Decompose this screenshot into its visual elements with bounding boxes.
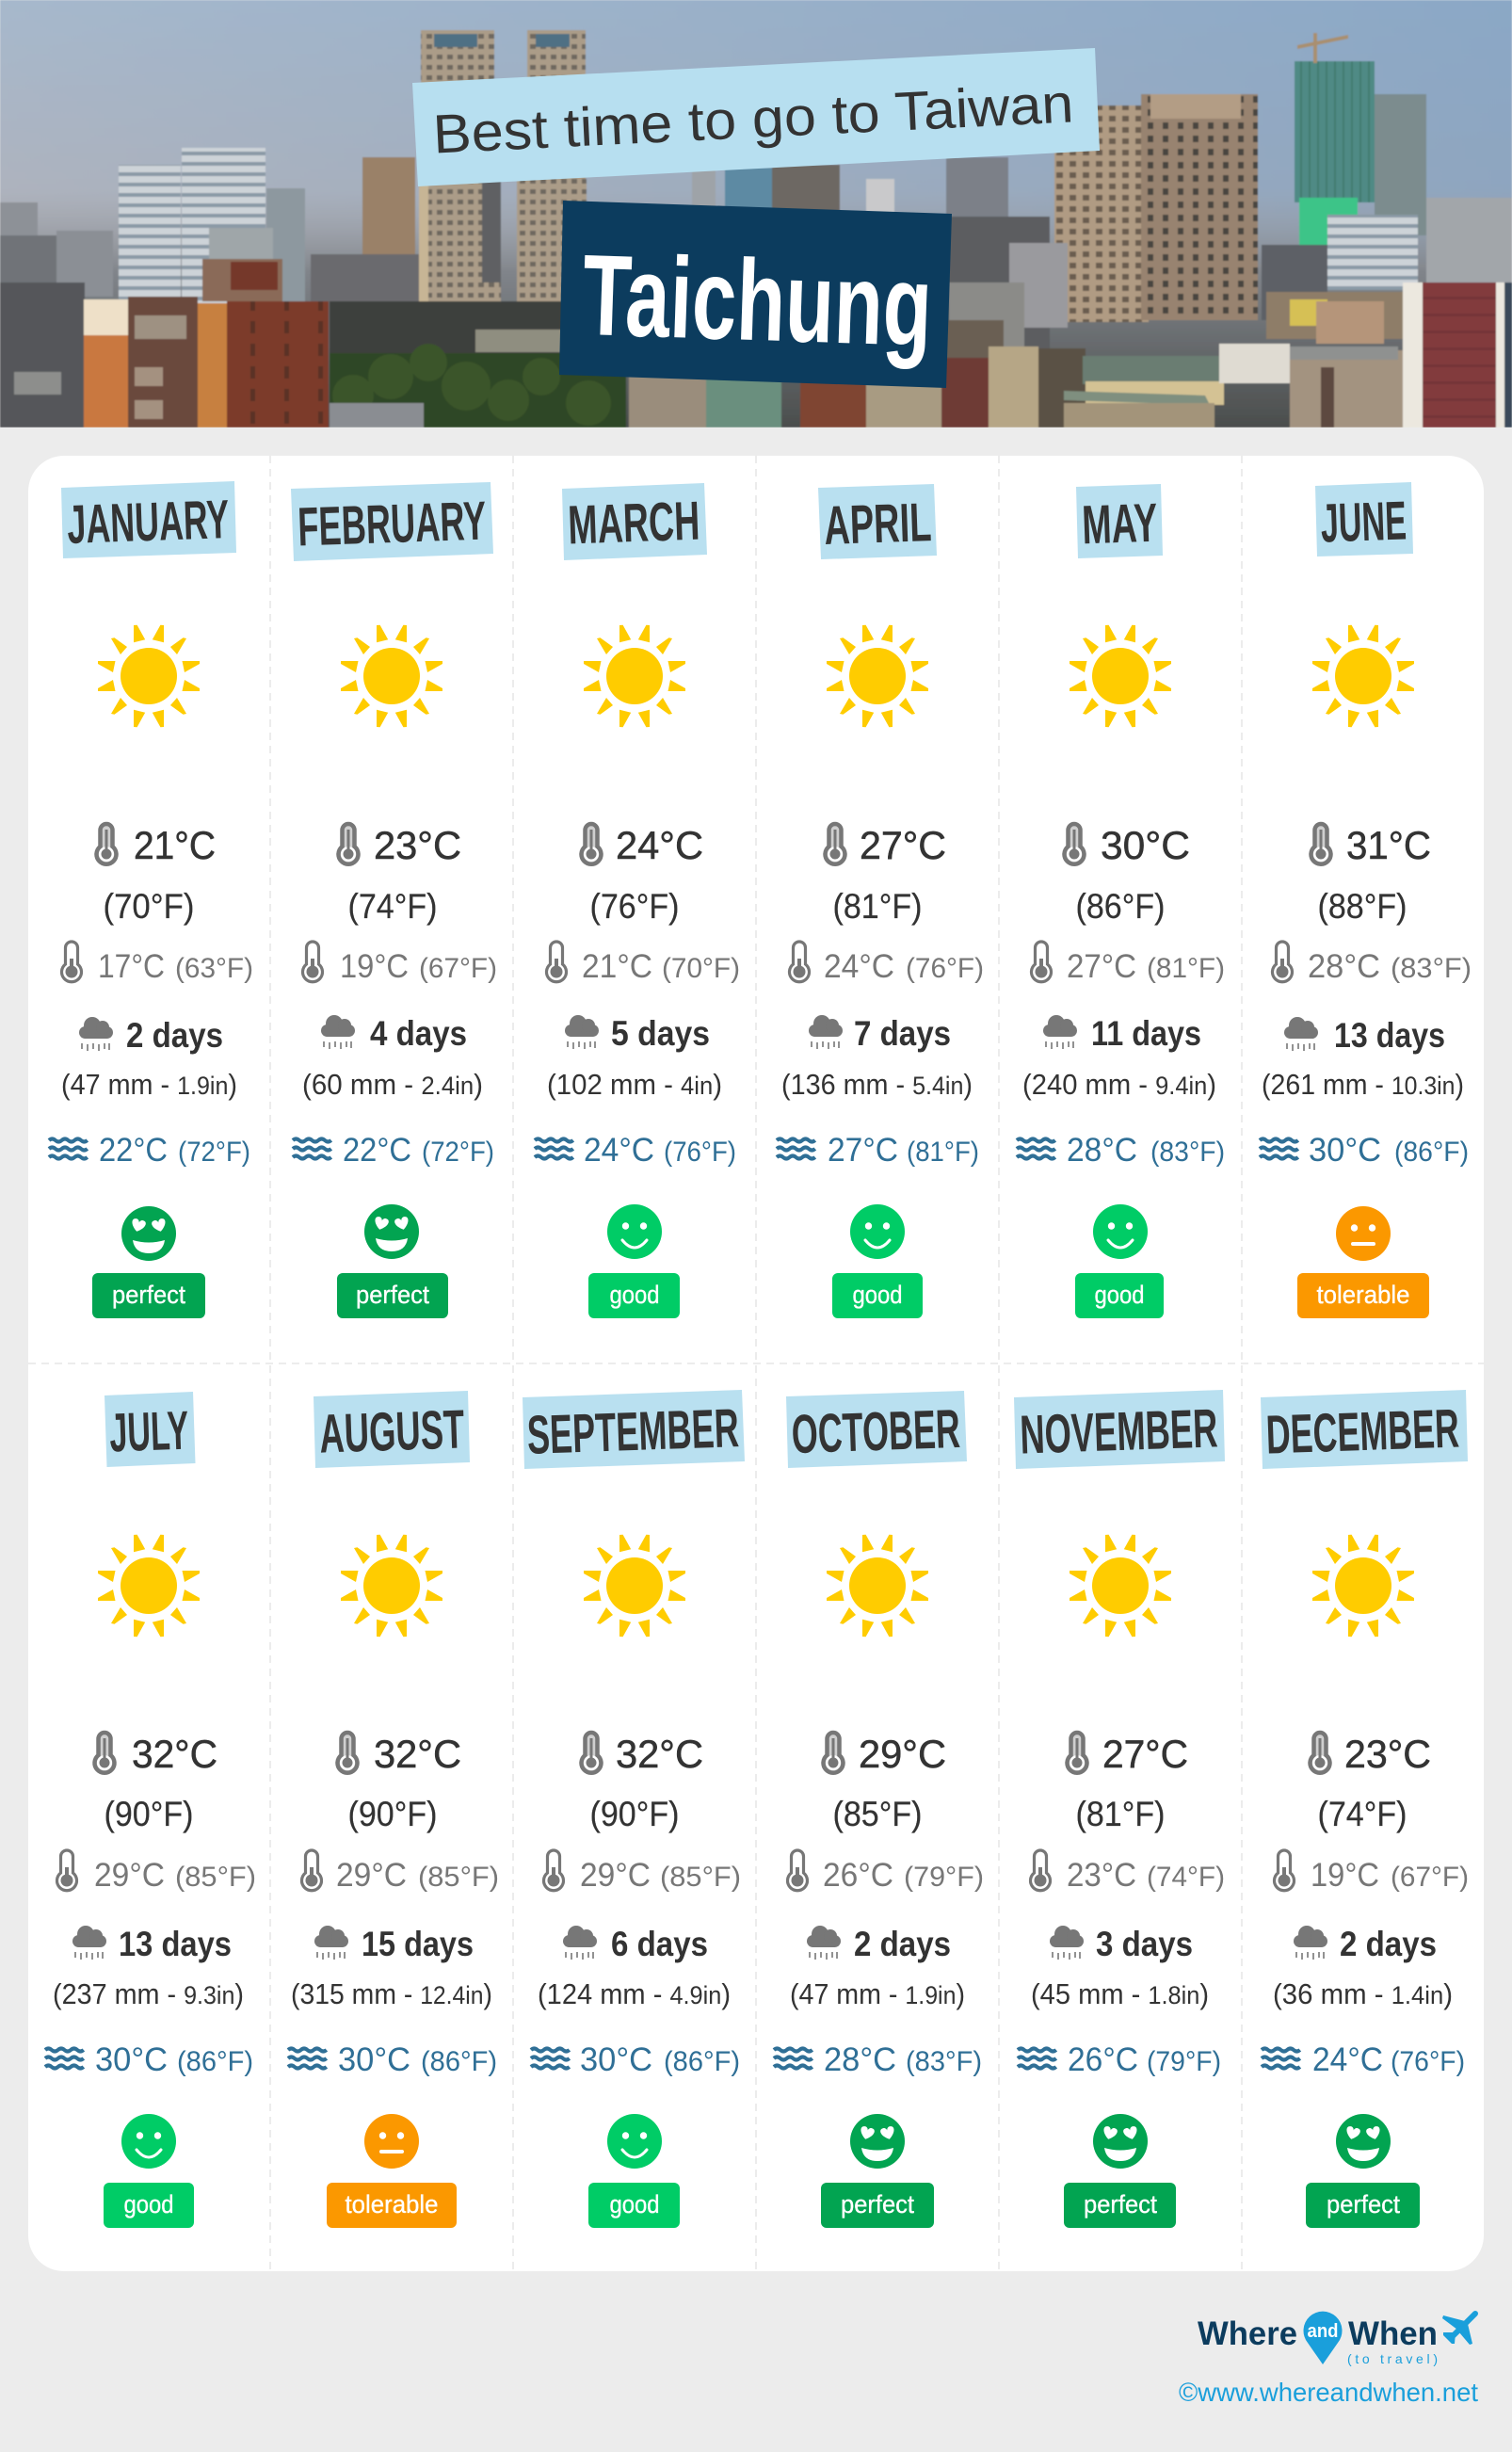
month label: [818, 484, 937, 559]
low temperature: [62, 942, 253, 985]
high temperature: [96, 823, 216, 867]
sea temperature: (76°F): [1391, 2046, 1465, 2077]
rainfall days: [563, 1925, 708, 1963]
rainfall days: [1284, 1016, 1445, 1055]
month label: [523, 1390, 745, 1469]
high temperature: [1068, 1732, 1188, 1776]
rainfall amount: (102 mm - 4in): [547, 1068, 722, 1101]
high temperature fahrenheit: (74°F): [1318, 1795, 1407, 1833]
month label: APRIL: [823, 492, 932, 557]
low temperature: 27°C: [1067, 948, 1136, 985]
sea temperature: (81°F): [907, 1137, 979, 1168]
sea temperature: (72°F): [178, 1137, 250, 1168]
rating badge: good: good: [1094, 1281, 1145, 1309]
rainfall days: [809, 1014, 951, 1053]
logo: Where and When: When: [1348, 2315, 1438, 2352]
high temperature fahrenheit: (74°F): [348, 887, 437, 926]
rainfall days: [1294, 1925, 1437, 1963]
rating face: perfect: [850, 2114, 905, 2169]
month label: [1076, 484, 1163, 558]
sea temperature: 28°C: [1067, 1132, 1137, 1169]
rating badge: tolerable: [1297, 1273, 1429, 1318]
month label: [1315, 482, 1413, 557]
sea temperature: [777, 1132, 979, 1169]
rating badge: perfect: [337, 1273, 448, 1318]
rainfall days: [314, 1925, 474, 1963]
low temperature: 21°C: [582, 948, 652, 985]
sea temperature: 22°C: [99, 1132, 168, 1169]
icon: sun: [1312, 1535, 1414, 1637]
rainfall amount: (124 mm - 4.9in): [538, 1977, 731, 2010]
sea temperature: (72°F): [422, 1137, 494, 1168]
rating badge: good: [1075, 1273, 1164, 1318]
rating face: perfect: [1093, 2114, 1148, 2169]
panel: April: [777, 484, 984, 1318]
panel: December: [1261, 1390, 1469, 2228]
rating face: good: [607, 1204, 662, 1259]
month label: JUNE: [1320, 490, 1407, 555]
rainfall days: 5 days: [611, 1014, 710, 1053]
rating badge: perfect: [1306, 2183, 1420, 2228]
sea temperature: (86°F): [177, 2046, 253, 2077]
rating badge: good: good: [853, 1281, 902, 1309]
month label: AUGUST: [318, 1398, 465, 1465]
low temperature: 17°C: [98, 948, 165, 985]
sea temperature: [1017, 1132, 1225, 1169]
sea temperature: [1260, 1132, 1469, 1169]
rating badge: good: [832, 1273, 923, 1318]
low temperature: (85°F): [660, 1862, 741, 1893]
high temperature fahrenheit: (90°F): [589, 1795, 680, 1833]
panel: March: [535, 483, 740, 1318]
website credit: ©www.whereandwhen.net: [1179, 2378, 1478, 2407]
rainfall days: [321, 1014, 467, 1053]
month label: [314, 1391, 470, 1468]
rainfall amount: (237 mm - 9.3in): [53, 1977, 244, 2010]
icon: airplane: [1442, 2314, 1475, 2345]
low temperature: 26°C: [823, 1857, 893, 1894]
low temperature: 29°C: [580, 1857, 651, 1894]
rainfall amount: (45 mm - 1.8in): [1031, 1977, 1209, 2010]
month label: [105, 1392, 196, 1467]
month label: MAY: [1081, 492, 1158, 556]
high temperature fahrenheit: (81°F): [832, 887, 923, 926]
rating badge: good: good: [610, 1281, 659, 1309]
rating badge: perfect: perfect: [841, 2190, 914, 2218]
icon: sun: [827, 625, 928, 727]
low temperature: [56, 1850, 256, 1894]
sea temperature: 24°C: [584, 1132, 654, 1169]
high temperature fahrenheit: (88°F): [1318, 887, 1407, 926]
month label: [1014, 1390, 1225, 1469]
icon: sun: [1312, 625, 1414, 727]
title banner: [412, 48, 1100, 186]
month label: [291, 482, 493, 561]
low temperature: (70°F): [662, 953, 740, 984]
high temperature: 31°C: [1346, 823, 1431, 867]
high temperature fahrenheit: (90°F): [348, 1795, 437, 1833]
sea temperature: 28°C: [824, 2041, 896, 2078]
low temperature: [789, 942, 984, 985]
rainfall days: 13 days: [119, 1925, 232, 1963]
sea temperature: 30°C: [95, 2041, 168, 2078]
low temperature: (79°F): [904, 1862, 984, 1893]
rating badge: good: good: [610, 2190, 659, 2218]
low temperature: [1030, 1850, 1225, 1894]
rating face: perfect: [121, 1206, 176, 1261]
low temperature: (67°F): [1391, 1862, 1469, 1893]
high temperature: 32°C: [132, 1732, 217, 1776]
high temperature fahrenheit: (85°F): [832, 1795, 923, 1833]
rainfall amount: (60 mm - 2.4in): [302, 1068, 483, 1101]
high temperature: 23°C: [374, 823, 461, 867]
sea temperature: [49, 1132, 250, 1169]
high temperature: 29°C: [859, 1732, 946, 1776]
rainfall amount: (47 mm - 1.9in): [61, 1068, 237, 1101]
high temperature fahrenheit: (90°F): [104, 1795, 194, 1833]
rainfall days: [807, 1925, 951, 1963]
month label: SEPTEMBER: [526, 1397, 740, 1466]
high temperature fahrenheit: (86°F): [1075, 887, 1166, 926]
rainfall days: 3 days: [1096, 1925, 1193, 1963]
rainfall days: 2 days: [854, 1925, 951, 1963]
sea temperature: (86°F): [421, 2046, 497, 2077]
rating face: tolerable: [364, 2114, 419, 2169]
high temperature: 32°C: [616, 1732, 703, 1776]
rating face: good: [121, 2114, 176, 2169]
panel: October: [774, 1391, 984, 2228]
sea temperature: [535, 1132, 736, 1169]
low temperature: [546, 942, 740, 985]
icon: sun: [584, 625, 685, 727]
rating badge: perfect: [1064, 2183, 1176, 2228]
rating badge: perfect: perfect: [112, 1281, 185, 1309]
panel: June: [1260, 482, 1472, 1318]
title banner: Best time to go to Taiwan: [431, 73, 1075, 166]
panel: May: [1017, 484, 1225, 1318]
icon: sun: [1070, 1535, 1171, 1637]
low temperature: [1032, 942, 1225, 985]
low temperature: (67°F): [419, 953, 497, 984]
rating badge: perfect: perfect: [1327, 2190, 1400, 2218]
logo: Where and When: Where: [1198, 2315, 1297, 2352]
sea temperature: (76°F): [664, 1137, 736, 1168]
month label: [786, 1391, 967, 1468]
sea temperature: (86°F): [1394, 1137, 1469, 1168]
low temperature: 24°C: [824, 948, 894, 985]
low temperature: 29°C: [336, 1857, 407, 1894]
rating badge: tolerable: [327, 2183, 457, 2228]
rainfall amount: (36 mm - 1.4in): [1273, 1977, 1453, 2010]
icon: sun: [341, 1535, 442, 1637]
city name banner: [559, 201, 952, 388]
month label: FEBRUARY: [297, 491, 487, 557]
panel: August: [288, 1391, 499, 2228]
rainfall days: [1043, 1014, 1201, 1053]
icon: sun: [584, 1535, 685, 1637]
logo: Where and When: [1198, 2312, 1475, 2366]
low temperature: (76°F): [906, 953, 984, 984]
low temperature: (74°F): [1147, 1862, 1225, 1893]
sea temperature: 27°C: [828, 1132, 898, 1169]
rainfall days: 2 days: [126, 1016, 223, 1055]
high temperature fahrenheit: (70°F): [104, 887, 194, 926]
sea temperature: [774, 2041, 982, 2078]
low temperature: [544, 1850, 741, 1894]
sea temperature: 26°C: [1068, 2041, 1138, 2078]
rainfall amount: (136 mm - 5.4in): [781, 1068, 973, 1101]
icon: sun: [98, 1535, 200, 1637]
month label: OCTOBER: [791, 1398, 961, 1465]
rating badge: perfect: perfect: [356, 1281, 429, 1309]
sea temperature: 22°C: [343, 1132, 411, 1169]
sea temperature: 30°C: [338, 2041, 410, 2078]
rainfall days: 4 days: [370, 1014, 467, 1053]
logo: Where and When: (to travel): [1347, 2351, 1438, 2366]
month label: JULY: [108, 1400, 189, 1463]
sea temperature: [531, 2041, 740, 2078]
rainfall days: 2 days: [1340, 1925, 1437, 1963]
month label: NOVEMBER: [1019, 1397, 1218, 1466]
low temperature: (81°F): [1147, 953, 1225, 984]
rating badge: good: [104, 2183, 194, 2228]
rainfall days: 6 days: [611, 1925, 708, 1963]
low temperature: [301, 1850, 499, 1894]
rainfall days: [79, 1016, 223, 1055]
high temperature: [94, 1732, 217, 1776]
rating badge: good: [588, 2183, 680, 2228]
rating badge: tolerable: tolerable: [345, 2190, 439, 2218]
rating badge: perfect: [821, 2183, 934, 2228]
rating face: perfect: [364, 1204, 419, 1259]
icon: map pin: [1303, 2312, 1343, 2364]
rainfall amount: (315 mm - 12.4in): [291, 1977, 492, 2010]
month label: [562, 483, 707, 560]
low temperature: (85°F): [418, 1862, 499, 1893]
rainfall amount: (47 mm - 1.9in): [790, 1977, 965, 2010]
month label: JANUARY: [66, 489, 230, 556]
month label: MARCH: [567, 491, 700, 556]
low temperature: (85°F): [175, 1862, 256, 1893]
sea temperature: (86°F): [664, 2046, 740, 2077]
icon: sun: [827, 1535, 928, 1637]
high temperature: 30°C: [1101, 823, 1190, 867]
rating face: good: [607, 2114, 662, 2169]
high temperature: 24°C: [616, 823, 703, 867]
low temperature: (83°F): [1391, 953, 1472, 984]
low temperature: 28°C: [1308, 948, 1380, 985]
rainfall days: 11 days: [1091, 1014, 1201, 1053]
icon: sun: [98, 625, 200, 727]
rainfall amount: (240 mm - 9.4in): [1022, 1068, 1216, 1101]
panel: September: [523, 1390, 745, 2228]
low temperature: 19°C: [340, 948, 409, 985]
sea temperature: [288, 2041, 497, 2078]
sea temperature: (83°F): [906, 2046, 982, 2077]
rainfall days: 13 days: [1334, 1016, 1445, 1055]
icon: map pin: and: [1307, 2321, 1339, 2342]
low temperature: 23°C: [1067, 1857, 1136, 1894]
rainfall days: 15 days: [362, 1925, 474, 1963]
rainfall days: [1050, 1925, 1193, 1963]
low temperature: (63°F): [175, 953, 253, 984]
city name banner: Taichung: [581, 231, 934, 370]
low temperature: [1275, 1850, 1469, 1894]
rating badge: good: good: [124, 2190, 173, 2218]
calendar card: [28, 456, 1484, 2271]
header photo: Taichung skyline: [0, 0, 1512, 427]
rating badge: perfect: perfect: [1084, 2190, 1157, 2218]
low temperature: 29°C: [94, 1857, 165, 1894]
high temperature: 27°C: [860, 823, 946, 867]
panel: July: [45, 1392, 256, 2228]
rainfall amount: (261 mm - 10.3in): [1262, 1068, 1464, 1101]
sea temperature: (83°F): [1150, 1137, 1225, 1168]
sea temperature: [293, 1132, 494, 1169]
high temperature fahrenheit: (76°F): [589, 887, 680, 926]
high temperature: 27°C: [1102, 1732, 1188, 1776]
sea temperature: 30°C: [1309, 1132, 1381, 1169]
low temperature: [303, 942, 497, 985]
high temperature: 21°C: [134, 823, 216, 867]
rating badge: good: [588, 1273, 680, 1318]
sea temperature: 30°C: [580, 2041, 652, 2078]
sea temperature: [1262, 2041, 1465, 2078]
low temperature: 19°C: [1311, 1857, 1379, 1894]
panel: January: [49, 481, 253, 1318]
sea temperature: (79°F): [1147, 2046, 1221, 2077]
rainfall days: [72, 1925, 232, 1963]
sea temperature: [45, 2041, 253, 2078]
sea temperature: [1018, 2041, 1221, 2078]
rating face: tolerable: [1336, 1206, 1391, 1261]
sea temperature: 24°C: [1312, 2041, 1383, 2078]
high temperature: 23°C: [1344, 1732, 1431, 1776]
rainfall days: [565, 1014, 710, 1053]
rating badge: perfect: [92, 1273, 205, 1318]
high temperature: [1311, 823, 1431, 867]
panel: February: [291, 482, 497, 1318]
rating face: perfect: [1336, 2114, 1391, 2169]
rainfall days: 7 days: [854, 1014, 951, 1053]
rating badge: tolerable: tolerable: [1316, 1281, 1410, 1309]
rating face: good: [1093, 1204, 1148, 1259]
icon: sun: [1070, 625, 1171, 727]
icon: sun: [341, 625, 442, 727]
panel: November: [1014, 1390, 1225, 2228]
high temperature fahrenheit: (81°F): [1075, 1795, 1166, 1833]
month label: [61, 481, 236, 558]
high temperature: 32°C: [374, 1732, 461, 1776]
low temperature: [1273, 942, 1472, 985]
low temperature: [787, 1850, 984, 1894]
rating face: good: [850, 1204, 905, 1259]
